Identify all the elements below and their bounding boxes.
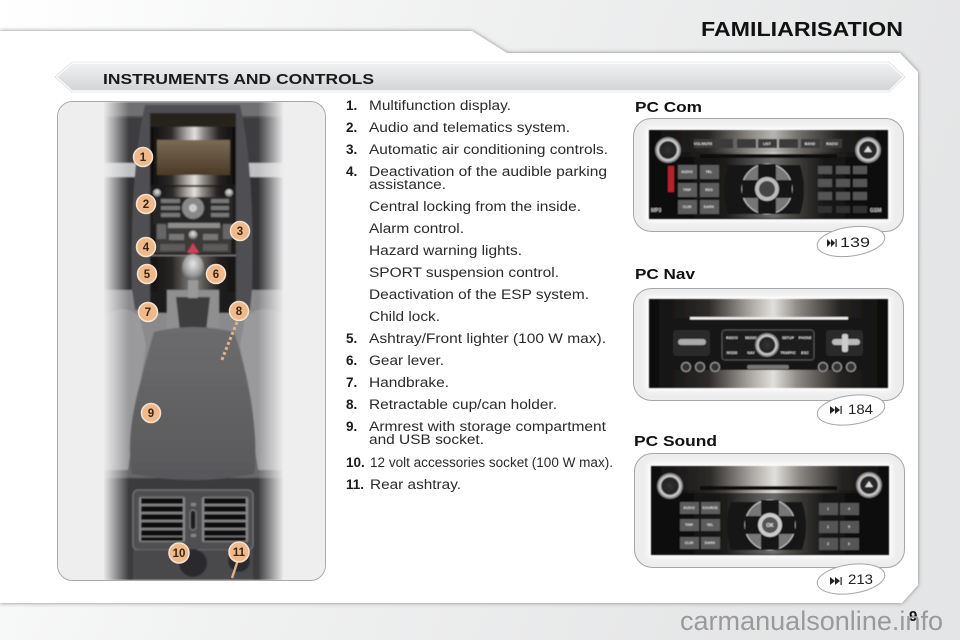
preset buttons [682,362,856,372]
numbered list of controls: Armrest with storage compartment [369,419,606,434]
centre button block: TRAFFIC [780,351,796,355]
left button grid: DARK [705,541,716,545]
rear vent panel [133,490,253,550]
fascia [150,184,236,314]
audio unit [154,197,232,224]
page reference: 139: 139 [840,235,870,250]
dashboard background [104,115,282,119]
left control [673,330,710,356]
joystick [727,500,806,550]
numbered list of controls: Handbrake. [369,375,449,390]
numbered list of controls: Deactivation of the audible parking [369,164,607,179]
numbered list of controls: Retractable cup/can holder. [369,397,557,412]
number badges: 11 [233,547,246,559]
left button grid: AUDIO [681,170,693,174]
number badges: 9 [148,408,154,420]
numbered list of controls: Alarm control. [369,221,464,236]
page title: FAMILIARISATION [701,18,903,41]
numbered list of controls: Ashtray/Front lighter (100 W max). [369,331,606,346]
numbered list of controls: Hazard warning lights. [369,243,522,258]
left button grid: CLIM [685,541,693,545]
left button grid: AUDIO [683,506,695,510]
number badges: 5 [144,269,151,281]
panel: PC Sound radio [634,454,904,568]
centre button block [722,330,814,369]
centre button block: MODE [727,351,738,355]
panel: PC Com radio [634,118,904,232]
numbered list of controls: 10. [346,455,365,470]
number keys: 6 [848,542,850,546]
left button grid: CLIM [683,205,691,209]
numbered list of controls: 9. [346,419,357,434]
number badges: 6 [213,269,219,281]
panel: centre console photo [58,102,326,580]
number badges: 2 [143,199,149,211]
callout lines [221,322,238,578]
numbered list of controls: 8. [346,397,357,412]
right seat [240,310,280,471]
numbered list of controls: Rear ashtray. [370,477,461,492]
numbered list of controls: 1. [346,98,357,113]
numbered list of controls: 7. [346,375,357,390]
joystick [724,164,804,214]
hazard triangle [187,243,199,253]
left seat [107,310,146,471]
panel: PC Com radio: GSM [870,208,881,214]
numbered list of controls: 11. [346,477,364,492]
numbered list of controls: and USB socket. [369,432,484,447]
number badges: 10 [173,548,185,560]
top buttons: LIST [763,142,772,146]
left button grid: SOURCE [702,506,718,510]
number badges: 8 [236,306,243,318]
page reference: 139 [815,222,887,261]
centre button block: NAV [747,351,755,355]
left button grid [680,502,720,549]
numbered list of controls: 3. [346,142,357,157]
number badges [134,148,250,563]
numbered list of controls: 4. [346,164,357,179]
gear lever [166,288,220,314]
heading: PC Sound: PC Sound [634,433,717,450]
climate controls [156,225,231,253]
left button grid: DARK [704,205,715,209]
top buttons: RADIO [826,142,838,146]
section banner [55,62,905,92]
numbered list of controls: SPORT suspension control. [369,265,559,280]
left button grid [678,165,719,214]
joystick: OK [766,523,774,529]
numbered list of controls: 5. [346,331,357,346]
console surround [132,105,252,310]
number keys: 4 [848,507,850,511]
lower socket area [133,550,253,580]
numbered list of controls: Automatic air conditioning controls. [369,142,608,157]
centre button block: ESC [801,351,809,355]
keypad [818,166,867,213]
numbered list of controls: Child lock. [369,309,440,324]
section banner: INSTRUMENTS AND CONTROLS [103,71,374,88]
number badges: 7 [145,307,151,319]
numbered list of controls: Deactivation of the ESP system. [369,287,589,302]
numbered list of controls: Audio and telematics system. [369,120,570,135]
number keys [819,503,859,550]
number keys: 2 [827,525,829,529]
centre button block: MUSIC [745,336,757,340]
number keys: 1 [827,507,829,511]
page number: 9 [909,608,917,625]
centre button block: PHONE [799,336,812,340]
page reference: 184: 184 [848,402,874,417]
heading: PC Com: PC Com [635,99,702,116]
number badges: 1 [140,152,147,164]
numbered list of controls: 2. [346,120,357,135]
number badges: 3 [237,226,243,238]
armrest [130,327,255,480]
centre button block: SETUP [782,336,795,340]
heading: PC Nav: PC Nav [635,266,696,283]
numbered list of controls [346,98,613,492]
left button grid: TEL [706,170,713,174]
left button grid: TEL [707,523,714,527]
right control [826,330,863,356]
numbered list of controls: 6. [346,353,357,368]
panel: PC Nav radio [634,288,904,400]
left button grid: RDS [705,188,713,192]
left button grid: TRIP [685,523,694,527]
left button grid: TRIP [683,188,692,192]
number keys: 5 [848,525,850,529]
numbered list of controls: assistance. [369,177,446,192]
panel: PC Com radio: MP3 [651,208,662,214]
number badges: 4 [143,242,150,254]
number keys: 3 [827,542,829,546]
watermark: carmanualsonline.info [680,606,943,636]
page reference: 213: 213 [848,572,873,587]
page reference: 213 [815,560,887,598]
numbered list of controls: 12 volt accessories socket (100 W max). [370,455,613,470]
display [157,140,230,175]
top buttons: VOL/MUTE [694,142,713,146]
page reference: 184 [815,391,887,429]
centre button block: RADIO [726,336,738,340]
top buttons [694,139,842,148]
top buttons: BAND [805,142,816,146]
numbered list of controls: Multifunction display. [369,98,511,113]
numbered list of controls: Central locking from the inside. [369,199,581,214]
numbered list of controls: Gear lever. [369,353,444,368]
